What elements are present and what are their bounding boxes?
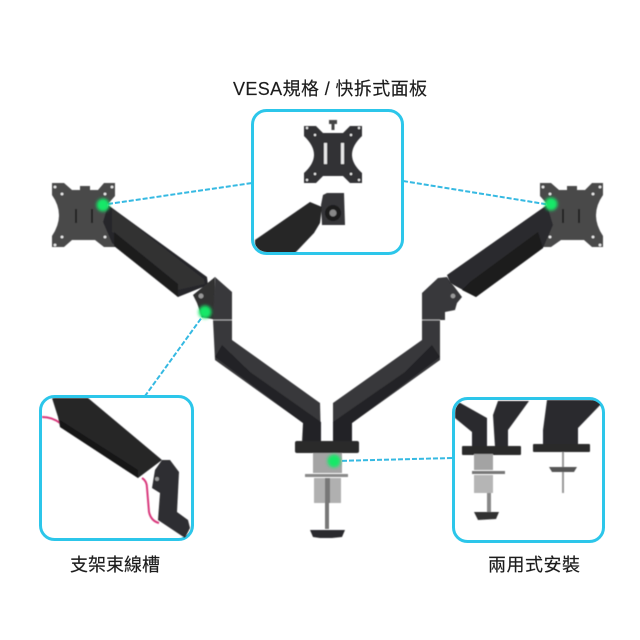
clamp [313,453,342,473]
arm [52,398,162,478]
VESA plate right [540,183,603,247]
plate holes left [54,186,113,246]
left monitor arm [52,183,217,320]
bracket [321,193,345,225]
grommet mount [543,400,605,445]
panel: cable management [40,396,192,540]
seam line [213,319,440,321]
elbow [152,460,190,538]
panel: VESA quick release [252,110,402,254]
lower arm right [333,277,462,441]
dashed connectors [108,181,551,461]
upper arm left [103,205,208,297]
caption: dual mounting: 兩用式安裝 [488,555,580,575]
upper arm right [447,205,553,297]
center arms [213,277,462,538]
base plate [295,441,359,453]
infographic: dual monitor arm [39,79,605,573]
lower arm left [213,277,321,441]
VESA plate left [52,183,115,247]
panel: two mounting options [454,398,605,542]
thumb screw [329,120,337,130]
green hotspots [96,198,558,468]
pink cable [42,417,159,523]
right monitor arm [447,183,603,298]
knob [310,530,345,538]
plate holes right [542,186,601,246]
heading: VESA: VESA規格 / 快拆式面板 [233,79,427,99]
quick release plate [304,126,362,183]
arm [255,202,322,253]
elbow left [193,277,217,320]
clamp mount [455,400,529,447]
caption: cable channel: 支架束線槽 [70,555,160,575]
